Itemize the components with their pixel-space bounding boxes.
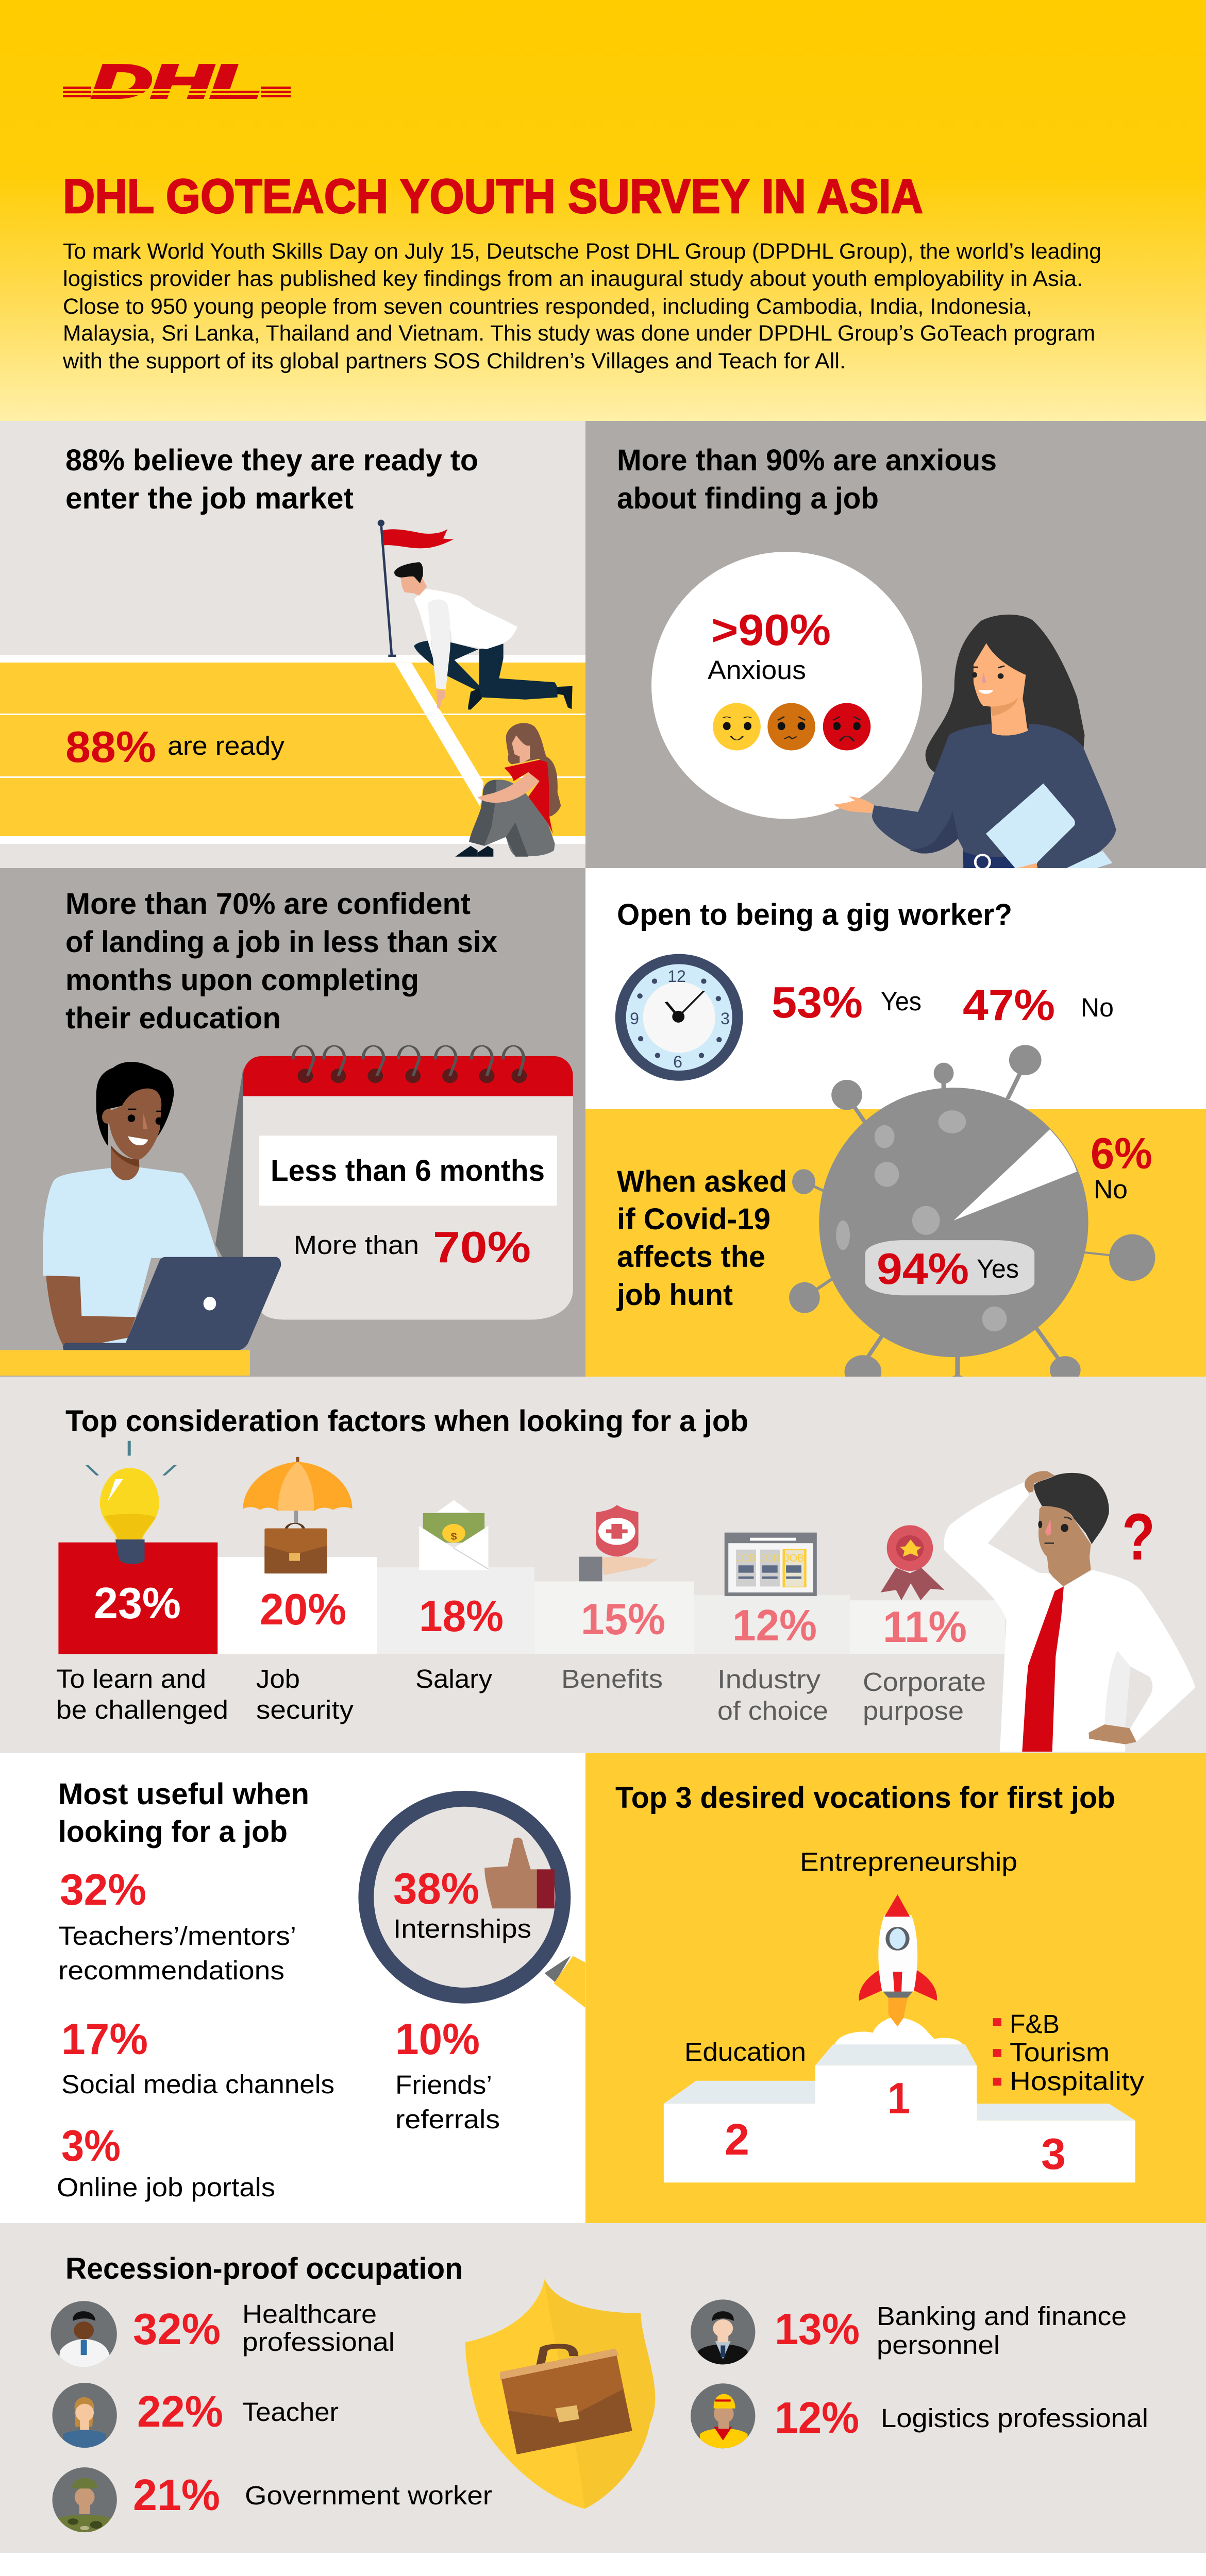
panel: confident of landing a job — [0, 868, 585, 1377]
DHL logo — [63, 56, 291, 108]
icon: rocket and podium — [664, 1894, 1135, 2182]
factor: industry of choice: 12% — [732, 1601, 817, 1650]
icon: light bulb — [87, 1441, 175, 1564]
panel: covid-19 job hunt — [585, 1045, 1206, 1395]
figure: woman holding folder — [834, 615, 1116, 869]
factor: to learn: be challenged — [56, 1695, 228, 1724]
factor: job security — [256, 1585, 354, 1724]
stat: logistics — [775, 2394, 1148, 2443]
figure: man at laptop — [0, 1062, 281, 1376]
figure: man scratching head — [944, 1471, 1195, 1752]
speech circle with emoji faces — [651, 552, 922, 819]
stat: teacher: 22% — [137, 2387, 223, 2436]
vocation 1: entrepreneurship: Entrepreneurship — [800, 1847, 1017, 1876]
factor: industry of choice: Industry — [717, 1665, 821, 1694]
stat: 32% teachers — [58, 1866, 296, 1985]
stat: healthcare: Healthcare — [242, 2299, 377, 2329]
stat: 94% yes: Yes — [977, 1254, 1019, 1283]
panel: most useful when looking for a job — [0, 1753, 585, 2223]
stat: 10% friends: 10% — [395, 2015, 480, 2064]
factor: benefits: 15% — [581, 1595, 665, 1644]
icon: shield with briefcase — [465, 2279, 655, 2509]
stat: 3% online — [57, 2122, 275, 2202]
stat: 88% are ready — [65, 723, 285, 772]
intro text: Malaysia, Sri Lanka, Thailand and Vietnam. This study was done under DPDHL Group’s GoTeach program — [63, 321, 1095, 346]
heading — [617, 444, 997, 515]
vocation 3: f&b tourism hospitality: F&B — [1010, 2009, 1060, 2039]
factor: industry of choice — [717, 1601, 828, 1725]
panel: header — [0, 0, 1206, 421]
icon: clock: 6 — [673, 1053, 682, 1071]
heading — [65, 444, 478, 515]
icon: clock: 9 — [630, 1009, 639, 1028]
heading: of landing a job in less than six — [65, 925, 497, 959]
icon: job board — [725, 1533, 817, 1596]
panel: recession-proof occupation — [0, 2223, 1206, 2553]
DHL logo: DHL — [92, 56, 261, 108]
panel: most important skills — [0, 2553, 1206, 2576]
icon: clock — [615, 954, 743, 1081]
stat: teacher: Teacher — [242, 2397, 339, 2427]
stat: >90% anxious — [708, 606, 831, 685]
stat: government worker: Government worker — [245, 2481, 492, 2510]
stat: >90% anxious: Anxious — [708, 655, 806, 685]
heading — [65, 887, 497, 1035]
calendar text — [271, 1154, 545, 1272]
stat: 53% yes: 53% — [772, 978, 863, 1027]
title: DHL GOTEACH YOUTH SURVEY IN ASIA — [63, 169, 923, 223]
intro text: with the support of its global partners SOS Children’s Villages and Teach for All. — [62, 349, 846, 374]
icon: salary envelope — [419, 1500, 489, 1570]
heading: When asked — [617, 1165, 787, 1198]
heading: Most useful when — [58, 1777, 309, 1811]
icon: umbrella and briefcase — [243, 1457, 352, 1573]
factor: corporate purpose: 11% — [883, 1603, 967, 1652]
bar chart steps — [58, 1543, 1005, 1654]
vocation 3: f&b tourism hospitality: Hospitality — [1010, 2066, 1145, 2096]
panel: top 3 desired vocations — [585, 1753, 1206, 2223]
heading: Open to being a gig worker? — [617, 898, 1012, 931]
icon: clock: 12 — [667, 967, 686, 986]
icon: award ribbon — [881, 1525, 945, 1600]
panel: top consideration factors — [0, 1377, 1206, 1753]
heading: Top consideration factors when looking for a job — [65, 1404, 748, 1438]
stat: 32% teachers: recommendations — [58, 1956, 284, 1985]
icon: job board: JOB — [736, 1553, 756, 1564]
stat: 3% online: 3% — [61, 2122, 121, 2171]
heading — [616, 1165, 787, 1312]
factor: corporate purpose — [863, 1603, 986, 1725]
vocation 1: entrepreneurship — [800, 1847, 1017, 2123]
icon: virus — [789, 1045, 1155, 1395]
factor: job security: security — [256, 1695, 354, 1724]
stat: 47% no — [963, 981, 1114, 1030]
icon: job board: JOB — [784, 1553, 804, 1564]
intro text: Close to 950 young people from seven countries responded, including Cambodia, India, Indonesia, — [63, 294, 1032, 319]
stat: healthcare: professional — [242, 2327, 395, 2357]
factor: salary: Salary — [415, 1664, 493, 1693]
figure: man scratching head: ? — [1122, 1500, 1155, 1574]
vocation 1: entrepreneurship: 1 — [887, 2074, 910, 2123]
factor: salary: 18% — [419, 1592, 504, 1641]
heading: their education — [65, 1002, 281, 1035]
stat: 47% no: No — [1081, 993, 1114, 1022]
heading: affects the — [617, 1240, 765, 1274]
icon: health shield and hand — [579, 1505, 658, 1581]
stat: banking: Banking and finance — [877, 2301, 1127, 2331]
factor: salary — [415, 1592, 504, 1693]
heading — [58, 1777, 309, 1849]
heading: if Covid-19 — [617, 1202, 770, 1236]
calendar text: Less than 6 months — [271, 1154, 545, 1188]
icon: clock: 3 — [721, 1009, 730, 1028]
heading: about finding a job — [617, 482, 879, 515]
heading: More than 70% are confident — [65, 887, 471, 921]
panel: gig worker — [585, 868, 1206, 1109]
factor: job security: 20% — [260, 1585, 346, 1634]
factor: to learn — [56, 1579, 228, 1724]
stat: 53% yes — [772, 978, 922, 1027]
heading: More than 90% are anxious — [617, 444, 997, 477]
stat: banking — [775, 2301, 1127, 2360]
stat: banking: personnel — [877, 2330, 1000, 2360]
icon: magnifier with thumb — [358, 1791, 585, 2008]
calendar text: More than — [294, 1230, 419, 1260]
heading: Recession-proof occupation — [65, 2252, 463, 2285]
stat: 3% online: Online job portals — [57, 2173, 275, 2202]
stat: 88% are ready: are ready — [167, 731, 285, 760]
heading: enter the job market — [65, 482, 354, 515]
stat: 6% no — [1091, 1129, 1152, 1204]
stat: 53% yes: Yes — [881, 987, 922, 1016]
stat: 94% yes: 94% — [877, 1245, 969, 1294]
stat: 6% no: No — [1094, 1175, 1128, 1204]
factor: corporate purpose: Corporate — [863, 1667, 986, 1697]
stat: healthcare — [133, 2299, 395, 2357]
avatars — [51, 2299, 755, 2532]
intro text: To mark World Youth Skills Day on July 15, Deutsche Post DHL Group (DPDHL Group), the world’s leading — [63, 239, 1101, 264]
stat: 32% teachers: Teachers’/mentors’ — [58, 1921, 296, 1951]
stat: logistics: Logistics professional — [881, 2403, 1148, 2433]
intro text — [62, 239, 1101, 374]
stat: 10% friends: Friends’ — [395, 2070, 492, 2099]
vocation 2: education — [684, 2037, 806, 2164]
icon: job board: JOB — [760, 1553, 780, 1564]
stat: government worker: 21% — [133, 2471, 220, 2520]
intro text: logistics provider has published key findings from an inaugural study about youth employability in Asia. — [63, 266, 1083, 291]
heading: months upon completing — [65, 963, 419, 997]
heading: Top 3 desired vocations for first job — [615, 1781, 1115, 1815]
stat: 38% internships: 38% — [393, 1865, 479, 1913]
stat: >90% anxious: >90% — [711, 606, 831, 655]
stat: teacher — [137, 2387, 339, 2436]
stat: 17% social media: Social media channels — [61, 2070, 334, 2099]
factor: to learn: To learn and — [56, 1664, 206, 1693]
figures: flag, runner and sitting woman — [378, 520, 573, 857]
stat: 17% social media: 17% — [61, 2015, 148, 2064]
stat: 17% social media — [61, 2015, 334, 2099]
stat: 88% are ready: 88% — [65, 723, 156, 772]
stat: 6% no: 6% — [1091, 1129, 1152, 1178]
stat: 10% friends — [395, 2015, 500, 2134]
running track — [0, 655, 585, 844]
stat: government worker — [133, 2471, 492, 2520]
icon: salary envelope: $ — [450, 1532, 457, 1542]
calendar text: 70% — [433, 1223, 531, 1272]
stat: 38% internships — [393, 1865, 531, 1943]
heading: looking for a job — [58, 1815, 288, 1849]
heading: job hunt — [616, 1278, 733, 1312]
stat: 94% yes — [877, 1245, 1019, 1294]
vocation 3: f&b tourism hospitality — [1010, 2009, 1145, 2179]
stat: 47% no: 47% — [963, 981, 1055, 1030]
factor: benefits: Benefits — [561, 1664, 663, 1693]
panel: anxious about finding a job — [585, 421, 1206, 869]
vocation 2: education: Education — [684, 2037, 806, 2066]
factor: job security: Job — [256, 1664, 300, 1693]
vocation 3: f&b tourism hospitality: Tourism — [1010, 2038, 1110, 2067]
factor: benefits — [561, 1595, 665, 1693]
factor: to learn: 23% — [94, 1579, 181, 1628]
stat: logistics: 12% — [775, 2394, 859, 2443]
vocation 2: education: 2 — [725, 2115, 749, 2164]
stat: 10% friends: referrals — [395, 2105, 500, 2134]
panel: ready for job market — [0, 421, 585, 868]
calendar — [215, 1046, 573, 1319]
stat: 32% teachers: 32% — [60, 1866, 146, 1914]
stat: banking: 13% — [775, 2305, 860, 2354]
vocation 3: f&b tourism hospitality: 3 — [1041, 2130, 1066, 2179]
stat: 38% internships: Internships — [393, 1914, 531, 1943]
factor: industry of choice: of choice — [717, 1696, 828, 1725]
stat: healthcare: 32% — [133, 2305, 221, 2354]
heading: 88% believe they are ready to — [65, 444, 478, 477]
factor: corporate purpose: purpose — [863, 1696, 964, 1725]
